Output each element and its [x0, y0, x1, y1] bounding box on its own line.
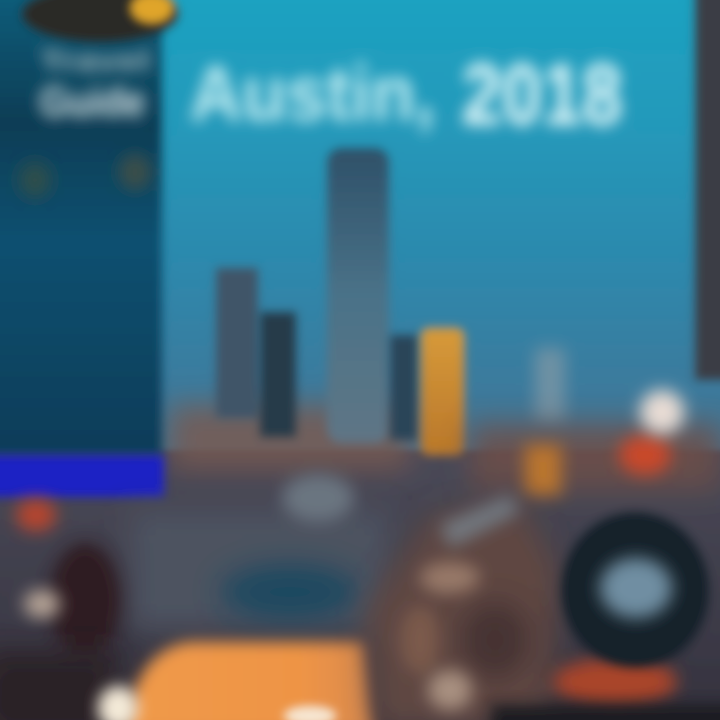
pale distant tower — [535, 348, 565, 423]
red neon sign — [16, 499, 56, 531]
left foreground building — [0, 0, 164, 531]
red collar — [553, 658, 677, 706]
title: Austin, — [190, 49, 435, 137]
mid-rise dark building — [216, 268, 258, 418]
lower white highlight — [284, 706, 336, 720]
red rooftop — [619, 435, 671, 475]
pale highlight — [24, 590, 60, 618]
skyline — [170, 148, 720, 495]
device edge — [440, 495, 520, 548]
left foreground figure — [0, 542, 121, 720]
white corner highlight — [98, 686, 138, 720]
title: 2018 — [462, 47, 622, 143]
wrist highlight — [428, 670, 472, 710]
finger dark gap — [461, 602, 529, 678]
finger highlight — [420, 562, 480, 594]
dark building beside tower — [390, 335, 418, 440]
sign upper caption: Travel — [40, 45, 150, 76]
bright rooftop — [640, 390, 684, 434]
teal vehicle — [220, 564, 360, 620]
ground — [0, 450, 720, 720]
street — [130, 474, 390, 630]
lower shadow — [0, 650, 120, 720]
yellow sign accent — [130, 0, 174, 24]
parked car — [282, 474, 354, 522]
black cap — [561, 512, 709, 668]
sign caption: Guide — [40, 78, 145, 125]
sky background — [0, 0, 720, 460]
cap logo — [600, 558, 672, 618]
short dark building — [260, 312, 296, 437]
person with dark cap — [490, 512, 720, 720]
right edge dark building — [695, 0, 720, 380]
window glow right — [119, 154, 151, 190]
dark bottom band — [490, 704, 720, 720]
orange building — [421, 328, 464, 455]
main tower — [327, 148, 389, 443]
blue neon strip — [0, 455, 164, 497]
window glow left — [19, 162, 51, 198]
distant warm buildings — [170, 405, 410, 470]
finger highlight lower — [400, 606, 440, 674]
right warm city block — [470, 425, 720, 490]
top left sign — [22, 0, 178, 125]
hands holding device — [365, 495, 560, 720]
title — [190, 47, 622, 143]
orange table blob — [98, 642, 375, 720]
orange glow — [525, 445, 561, 495]
